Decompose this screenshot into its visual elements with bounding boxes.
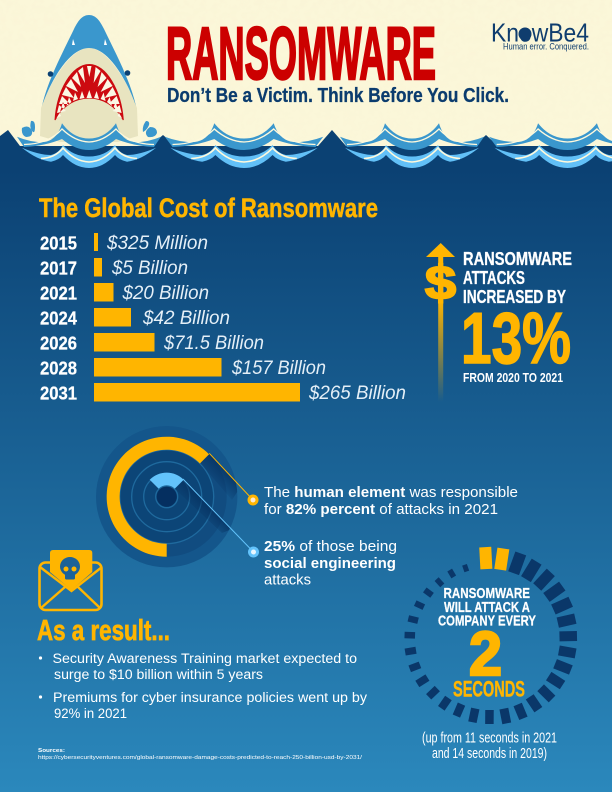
heading: as a result: As a result...	[37, 615, 170, 647]
icon: dollar arrow: $	[425, 256, 456, 309]
bar row 2017	[40, 258, 188, 279]
callout: attack every 2 seconds: COMPANY EVERY	[438, 614, 536, 630]
sources: https://cybersecurityventures.com/global-ransomware-damage-costs-predicted-to-reach-250-billion-usd-by-2031/	[38, 755, 363, 761]
bar row 2024	[40, 308, 230, 329]
bar row 2015: 2015	[40, 232, 77, 254]
bar row 2028: 2028	[40, 358, 77, 378]
note: previous attack frequency	[422, 730, 557, 762]
bar row 2031	[40, 382, 406, 404]
bar row 2021: $20 Billion	[122, 283, 209, 304]
text: social engineering: attacks	[264, 572, 311, 588]
bar row 2017: $5 Billion	[111, 258, 188, 279]
bullet: security awareness: Security Awareness Training market expected to	[52, 651, 357, 666]
callout: attacks increased 13%	[461, 249, 572, 385]
sources	[38, 748, 363, 761]
callout: attack every 2 seconds: WILL ATTACK A	[444, 600, 530, 616]
subtitle: Don’t Be a Victim. Think Before You Click.	[167, 84, 509, 107]
bar row 2021: 2021	[40, 282, 77, 304]
bar row 2031: $265 Billion	[308, 383, 406, 404]
text: human element: The human element was responsible	[264, 484, 518, 501]
note: previous attack frequency: and 14 seconds in 2019)	[432, 746, 547, 762]
text: social engineering: social engineering	[264, 555, 396, 572]
bullet: security awareness: surge to $10 billion within 5 years	[54, 667, 263, 682]
bar row 2015	[40, 232, 208, 254]
bar row 2017: 2017	[40, 258, 77, 278]
chart: radial human element	[96, 426, 259, 567]
callout: attack every 2 seconds: RANSOMWARE	[444, 586, 530, 602]
sources: Sources:	[38, 748, 65, 754]
bar row 2015: $325 Million	[106, 233, 208, 254]
bar row 2024: $42 Billion	[142, 308, 230, 329]
callout: attacks increased 13%: 13%	[461, 299, 571, 379]
callout: attack every 2 seconds: SECONDS	[453, 676, 525, 702]
text: social engineering	[264, 538, 397, 588]
callout: attacks increased 13%: ATTACKS	[463, 268, 525, 288]
bar row 2028	[40, 358, 326, 379]
icon: dollar arrow	[425, 243, 456, 403]
callout: attacks increased 13%: RANSOMWARE	[463, 249, 572, 269]
text: human element: for 82% percent of attacks in 2021	[264, 501, 498, 518]
bar row 2026: $71.5 Billion	[163, 333, 264, 354]
bar chart: global cost by year	[40, 232, 406, 404]
bar row 2021	[40, 282, 209, 304]
logo: KnowBe4: Human error. Conquered.	[503, 42, 589, 52]
bar row 2024: 2024	[40, 308, 78, 328]
bullet: security awareness	[39, 651, 357, 682]
callout: attack every 2 seconds	[438, 586, 536, 702]
callout: attacks increased 13%: INCREASED BY	[463, 287, 566, 307]
header sand background	[0, 0, 612, 150]
logo: KnowBe4: KnowBe4	[491, 18, 589, 48]
callout: attacks increased 13%: FROM 2020 TO 2021	[463, 371, 563, 385]
icon: shark	[22, 15, 157, 142]
chart: countdown dial	[404, 547, 577, 724]
waves	[0, 123, 612, 172]
text: social engineering: 25% of those being	[264, 538, 397, 555]
bullet: cyber insurance: Premiums for cyber insurance policies went up by	[53, 690, 367, 705]
icon: envelope with skull	[40, 550, 102, 610]
bar row 2028: $157 Billion	[231, 358, 326, 379]
bullet list: results	[39, 651, 367, 721]
bar row 2031: 2031	[40, 382, 77, 404]
bullet: cyber insurance	[39, 690, 367, 721]
bullet: cyber insurance: 92% in 2021	[54, 706, 127, 721]
text: human element	[264, 484, 518, 518]
bar row 2026: 2026	[40, 332, 77, 354]
callout: attack every 2 seconds: 2	[469, 620, 502, 689]
bar row 2026	[40, 332, 264, 354]
heading: global cost: The Global Cost of Ransomware	[39, 193, 378, 223]
note: previous attack frequency: (up from 11 seconds in 2021	[422, 730, 557, 746]
